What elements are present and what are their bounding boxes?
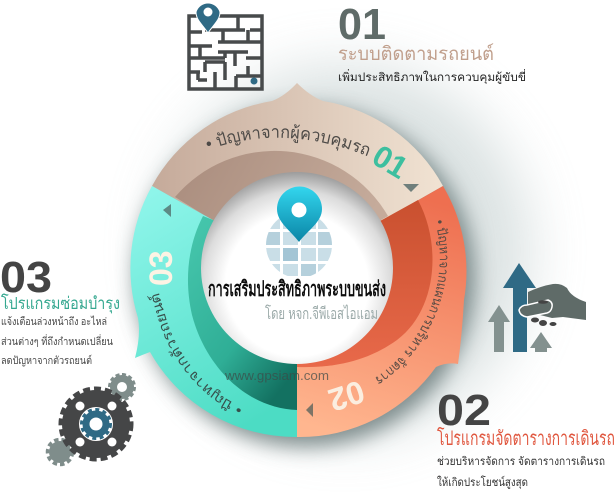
description 02 bbox=[437, 455, 605, 489]
marker triangle bbox=[306, 403, 313, 417]
block: 02 route scheduling bbox=[437, 386, 615, 489]
watermark url: www.gpsiam.com bbox=[224, 368, 329, 383]
title 01: ระบบติดตามรถยนต์ bbox=[338, 43, 494, 65]
pin marker bbox=[196, 3, 220, 33]
number 02: 02 bbox=[437, 386, 491, 435]
label: problems from the driver: • ปัญหาจากผู้ควบคุมรถ bbox=[206, 124, 370, 156]
icon: maze with pin bbox=[189, 3, 262, 89]
label: problems from the vehicle: • ปัญหาจากตัวรถยนต์ bbox=[147, 294, 241, 412]
description 03 bbox=[1, 315, 113, 367]
ring drop shadow bbox=[135, 65, 530, 447]
description 03: แจ้งเตือนล่วงหน้าถึง อะไหล่ bbox=[1, 315, 107, 328]
inner band tan bbox=[175, 151, 388, 270]
heading: centre title: การเสริมประสิทธิภาพระบบขนส่ง bbox=[208, 278, 386, 301]
icon: gears bbox=[48, 374, 134, 464]
icon: globe with location pin bbox=[265, 186, 333, 276]
block: 03 maintenance bbox=[0, 253, 120, 367]
blue centre gear bbox=[86, 414, 106, 434]
number 01 on ring: 01 bbox=[366, 138, 414, 186]
goal dot bbox=[250, 78, 258, 84]
inner band orange bbox=[297, 200, 432, 367]
description 03: ส่วนต่างๆ ที่ถึงกำหนดเปลี่ยน bbox=[1, 334, 113, 348]
large gear bbox=[62, 390, 130, 458]
description 02: ให้เกิดประโยชน์สูงสุด bbox=[437, 475, 528, 489]
inner band teal bbox=[188, 216, 297, 410]
centre circle bbox=[201, 172, 393, 364]
icon: hand and rising arrows bbox=[488, 263, 586, 352]
panel: ring segment 02 (orange) bbox=[297, 186, 466, 437]
small gear bottom bbox=[48, 440, 72, 464]
panel: ring segment 01 (tan) bbox=[152, 83, 443, 221]
number 03 on ring: 03 bbox=[143, 250, 179, 286]
hand bbox=[528, 284, 586, 320]
marker triangle bbox=[403, 184, 419, 192]
description 01: เพิ่มประสิทธิภาพในการควบคุมผู้ขับขี่ bbox=[338, 69, 526, 84]
number 03: 03 bbox=[0, 253, 52, 302]
description 03: ลดปัญหาจากตัวรถยนต์ bbox=[1, 354, 92, 367]
title 03: โปรแกรมซ่อมบำรุง bbox=[1, 293, 120, 314]
panel: ring segment 03 (teal) bbox=[130, 186, 297, 437]
number 01: 01 bbox=[338, 0, 386, 49]
marker triangle bbox=[163, 204, 171, 217]
number 02 on ring: 02 bbox=[324, 373, 369, 419]
small gear top bbox=[110, 374, 134, 400]
centre subtitle: โดย หจก.จีพีเอสไอแอม bbox=[265, 304, 378, 323]
block: 01 vehicle tracking bbox=[338, 0, 526, 84]
label: problems from route management: • ปัญหาจากแผนการบริหาร จัดการ bbox=[376, 220, 448, 384]
